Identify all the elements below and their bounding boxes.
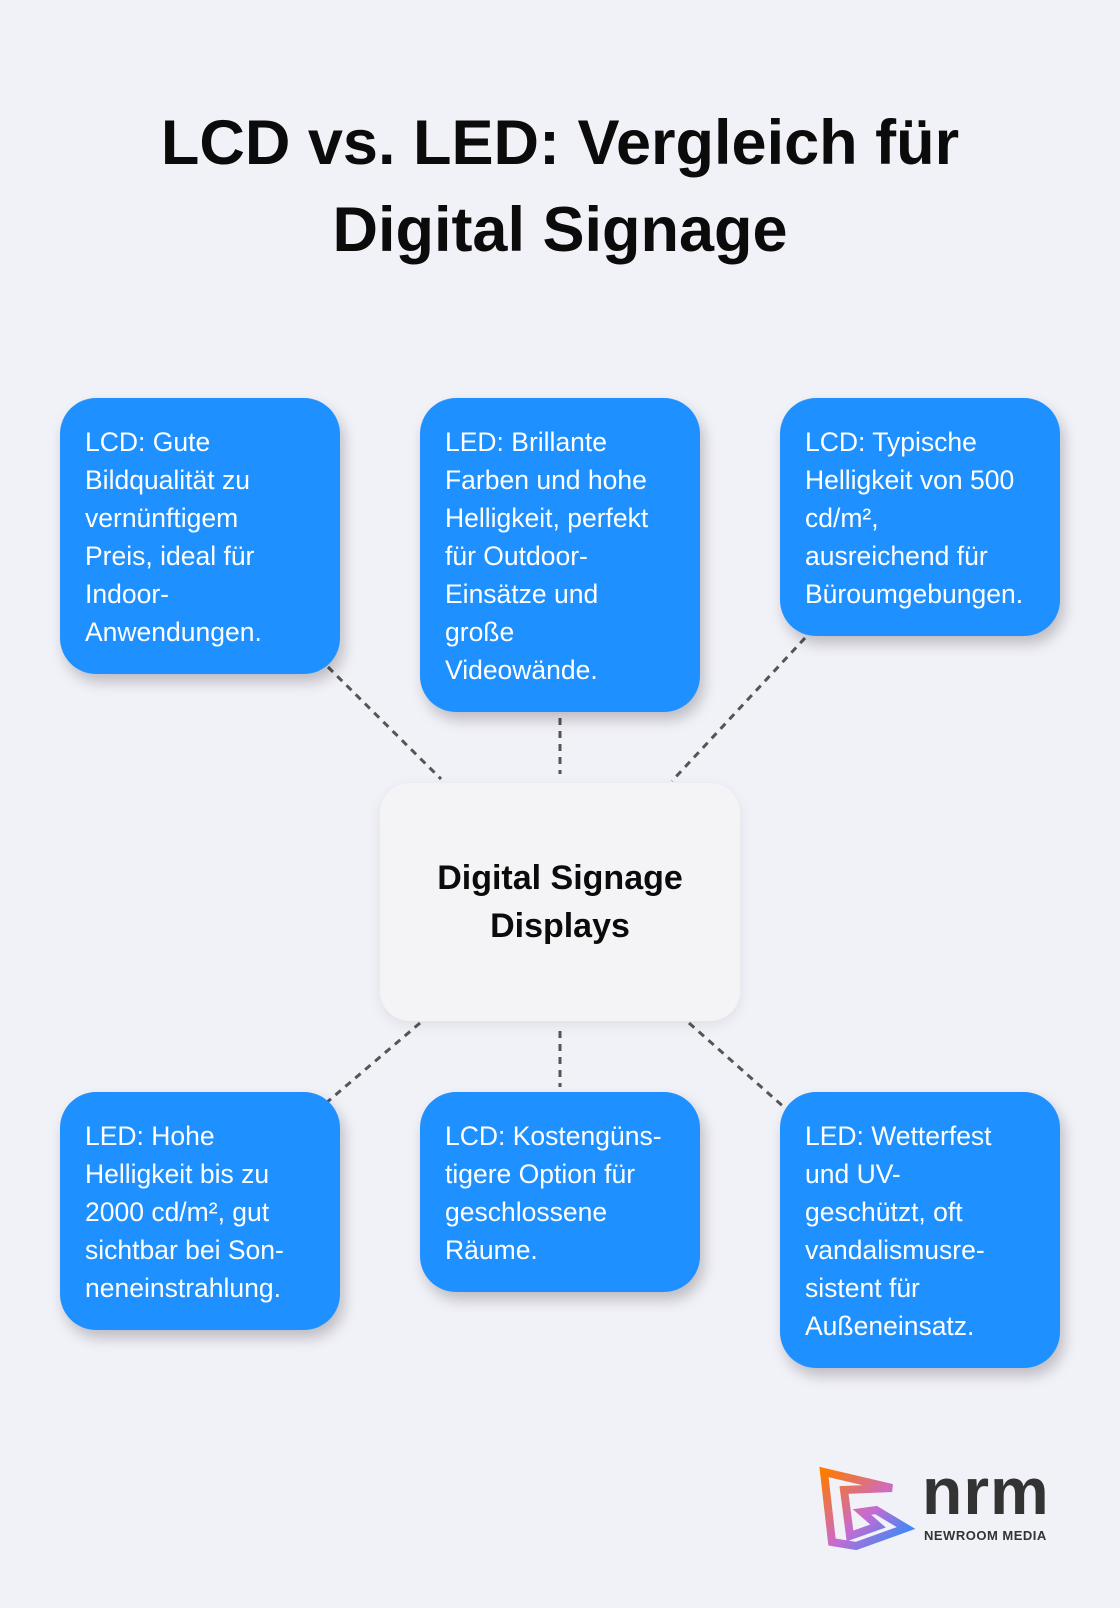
panel: LCD quality: Bildqualität zu bbox=[85, 465, 250, 495]
panel: LCD cost: LCD: Kostengüns- bbox=[445, 1121, 662, 1151]
panel: LCD brightness: cd/m², bbox=[805, 503, 879, 533]
panel: LCD brightness: Büroumgebungen. bbox=[805, 579, 1023, 609]
logo bbox=[819, 1454, 1050, 1550]
panel: LCD cost: geschlossene bbox=[445, 1197, 607, 1227]
panel: LED colors: Videowände. bbox=[445, 655, 598, 685]
panel: LCD cost: Räume. bbox=[445, 1235, 538, 1265]
panel: LED colors: große bbox=[445, 617, 514, 647]
panel: LED brightness: LED: Hohe bbox=[85, 1121, 215, 1151]
panel: LED colors: Farben und hohe bbox=[445, 465, 647, 495]
panel: LCD cost bbox=[420, 1092, 700, 1292]
panel: LCD quality: Indoor- bbox=[85, 579, 169, 609]
panel: LED colors: Einsätze und bbox=[445, 579, 598, 609]
title: Digital Signage bbox=[332, 195, 788, 265]
panel: LED weatherproof bbox=[780, 1092, 1060, 1368]
panel: LED colors: Helligkeit, perfekt bbox=[445, 503, 648, 533]
center node: Displays bbox=[490, 907, 630, 945]
title: LCD vs. LED: Vergleich für bbox=[161, 108, 959, 178]
panel: LED weatherproof: Außeneinsatz. bbox=[805, 1311, 974, 1341]
panel: LED colors: für Outdoor- bbox=[445, 541, 588, 571]
panel: LED brightness: Helligkeit bis zu bbox=[85, 1159, 269, 1189]
panel: LED colors bbox=[420, 398, 700, 712]
center node bbox=[380, 783, 740, 1021]
title bbox=[161, 108, 959, 265]
panel: LED brightness: neneinstrahlung. bbox=[85, 1273, 281, 1303]
logo: nrm bbox=[922, 1454, 1050, 1528]
panel: LCD brightness bbox=[780, 398, 1060, 636]
panel: LED weatherproof: sistent für bbox=[805, 1273, 920, 1303]
panel: LCD brightness: Helligkeit von 500 bbox=[805, 465, 1014, 495]
panel: LCD brightness: LCD: Typische bbox=[805, 427, 977, 457]
panel: LED weatherproof: geschützt, oft bbox=[805, 1197, 963, 1227]
logo: NEWROOM MEDIA bbox=[924, 1528, 1047, 1543]
center node: Digital Signage bbox=[437, 859, 683, 897]
panel: LED brightness bbox=[60, 1092, 340, 1330]
panel: LED weatherproof: vandalismusre- bbox=[805, 1235, 985, 1265]
panel: LCD cost: tigere Option für bbox=[445, 1159, 635, 1189]
panel: LED brightness: 2000 cd/m², gut bbox=[85, 1197, 269, 1227]
panel: LCD quality: Anwendungen. bbox=[85, 617, 262, 647]
panel: LED weatherproof: und UV- bbox=[805, 1159, 901, 1189]
panel: LED weatherproof: LED: Wetterfest bbox=[805, 1121, 992, 1151]
panel: LED brightness: sichtbar bei Son- bbox=[85, 1235, 284, 1265]
panel: LED colors: LED: Brillante bbox=[445, 427, 607, 457]
panel: LCD brightness: ausreichend für bbox=[805, 541, 988, 571]
panel: LCD quality: LCD: Gute bbox=[85, 427, 210, 457]
panel: LCD quality bbox=[60, 398, 340, 674]
panel: LCD quality: vernünftigem bbox=[85, 503, 238, 533]
panel: LCD quality: Preis, ideal für bbox=[85, 541, 254, 571]
